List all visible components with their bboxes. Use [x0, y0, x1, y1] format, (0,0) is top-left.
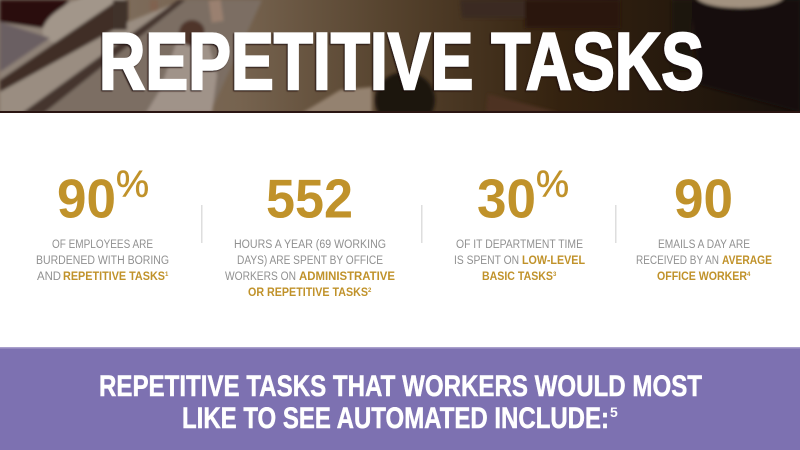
stat: 552 hours: HOURS A YEAR (69 WORKING	[234, 239, 386, 251]
stat: 90 percent of employees: 90	[57, 168, 116, 230]
banner heading: LIKE TO SEE AUTOMATED INCLUDE:	[182, 402, 609, 435]
stat: 30 percent of IT time: OF IT DEPARTMENT TIME	[456, 239, 583, 251]
stat: 90 percent of employees: OF EMPLOYEES ARE	[52, 239, 153, 251]
stat: 552 hours: 552	[266, 168, 353, 230]
stat: 552 hours: ADMINISTRATIVE	[299, 271, 395, 283]
stat: 90 emails: AVERAGE	[722, 255, 772, 267]
stat: 90 emails	[636, 168, 772, 283]
purple banner	[0, 347, 800, 450]
stat: 30 percent of IT time: 30	[477, 168, 536, 230]
stat: 90 emails: EMAILS A DAY ARE	[658, 239, 750, 251]
stat: 30 percent of IT time: LOW-LEVEL	[522, 255, 585, 267]
stat: 30 percent of IT time: IS SPENT ON	[454, 255, 519, 267]
stat: 90 emails: RECEIVED BY AN	[636, 255, 719, 267]
person blouse	[146, 42, 218, 111]
stat: 90 percent of employees	[36, 164, 169, 283]
stat: 552 hours: WORKERS ON	[225, 271, 296, 283]
stat: 90 emails: 4	[747, 272, 751, 278]
stat: 30 percent of IT time	[454, 164, 585, 283]
stat: 90 percent of employees: BURDENED WITH BORING	[36, 255, 169, 267]
stat: 90 emails: OFFICE WORKER	[657, 271, 748, 283]
divider 1	[201, 205, 202, 243]
banner heading	[99, 370, 702, 435]
stat: 30 percent of IT time: %	[536, 164, 569, 206]
divider 3	[615, 205, 616, 243]
stat: 90 percent of employees: %	[116, 164, 149, 206]
banner heading: 5	[610, 404, 618, 420]
stat: 90 emails: 90	[674, 168, 733, 230]
stat: 90 percent of employees: 1	[165, 272, 169, 278]
divider 2	[421, 205, 422, 243]
stat: 552 hours: OR REPETITIVE TASKS	[248, 287, 368, 299]
stat: 552 hours	[225, 168, 395, 299]
header photo background	[0, 0, 800, 113]
stat: 90 percent of employees: REPETITIVE TASKS	[63, 271, 165, 283]
stat: 552 hours: 2	[368, 288, 372, 294]
stat: 552 hours: DAYS) ARE SPENT BY OFFICE	[237, 255, 383, 267]
stat: 30 percent of IT time: BASIC TASKS	[482, 271, 553, 283]
stat: 30 percent of IT time: 3	[553, 272, 557, 278]
stat: 90 percent of employees: AND	[37, 271, 61, 283]
